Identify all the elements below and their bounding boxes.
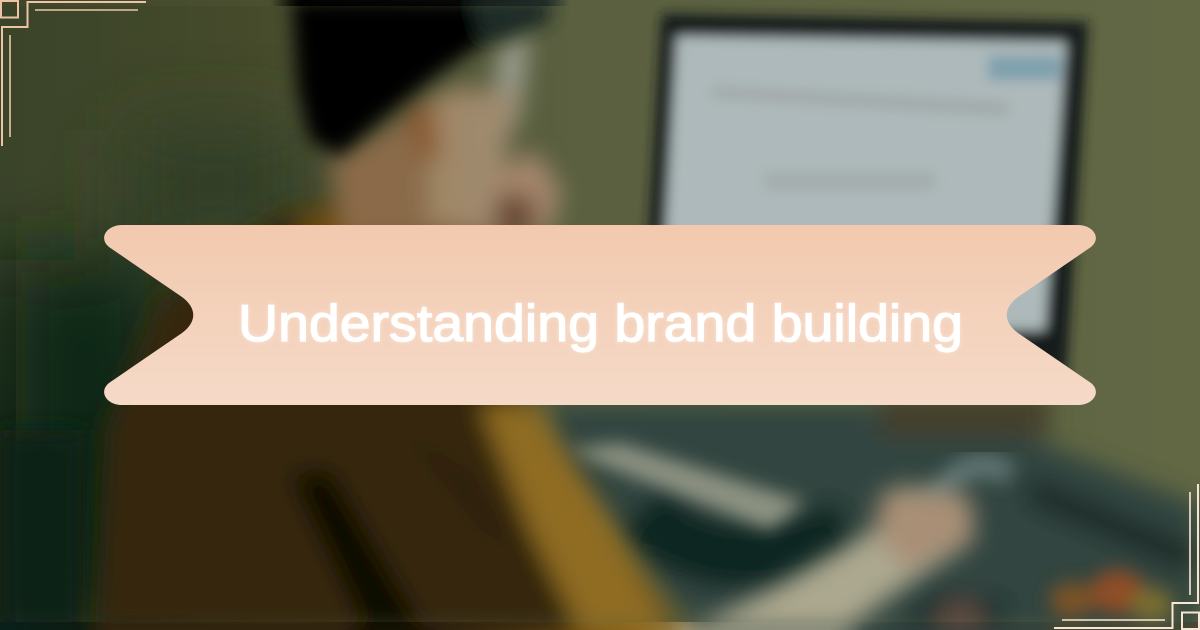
sleeve above the hand [930,466,1010,510]
monitor [640,14,1088,380]
orange objects on desk [1050,570,1174,623]
title: Understanding brand building [238,295,963,353]
dark hair [292,0,552,155]
arm and hand on desk [690,485,975,630]
keyboard [565,443,805,530]
head, neck and hand at face [330,35,562,240]
title: Understanding brand building [238,295,963,353]
desk [550,395,1200,630]
shirt [95,190,680,630]
